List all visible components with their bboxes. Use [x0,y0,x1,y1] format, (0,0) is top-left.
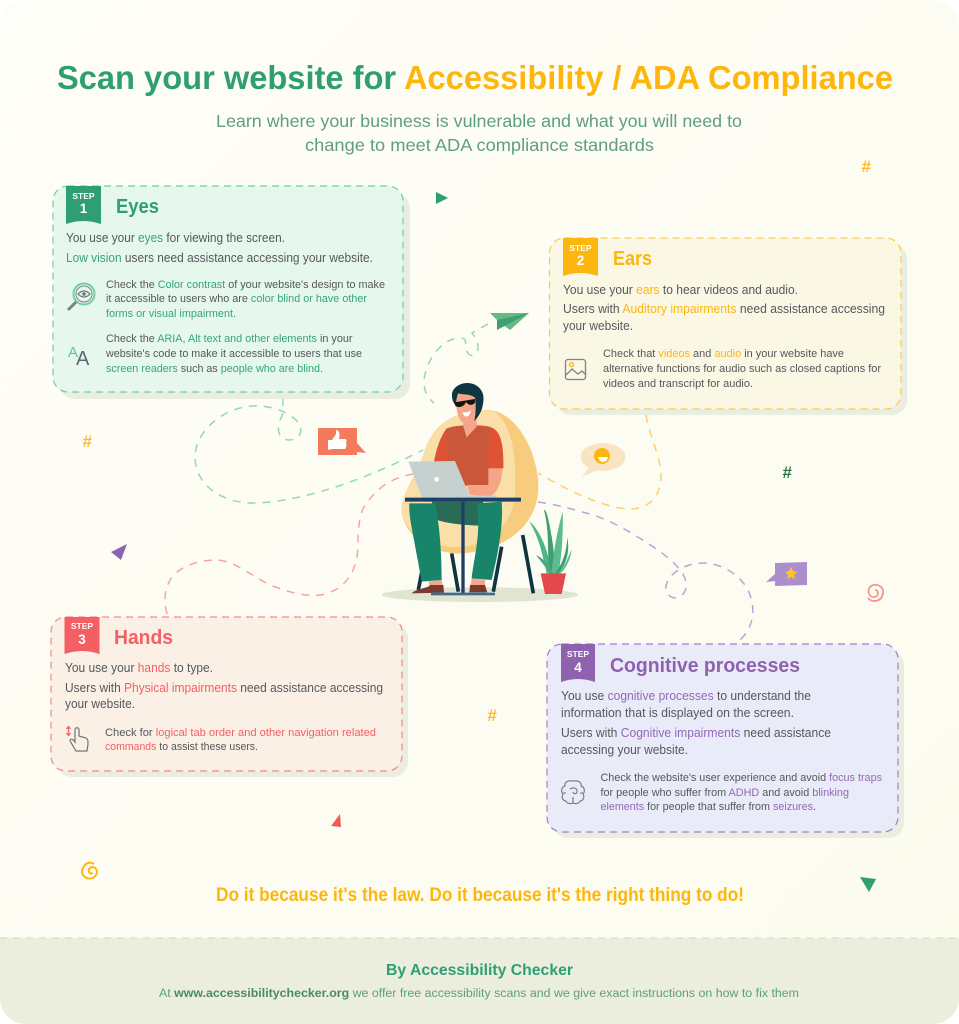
heading: cognitive processes: Cognitive processes [610,655,800,677]
heading: ears: Ears [613,248,652,270]
intro text: ears: your website. [563,319,633,333]
icon: magnifier with eye [68,284,94,310]
intro text: eyes [66,231,373,265]
heading: eyes: Eyes [116,196,159,218]
decorative hash: top right: # [861,157,871,176]
intro text: cognitive: accessing your website. [561,743,688,757]
step 1 ribbon: 1 [80,201,88,216]
step 4 ribbon: 4 [574,660,582,675]
dashed connector: green from eyes card to person [195,398,423,503]
footer heading: By Accessibility Checker [386,962,573,979]
step 3 ribbon [64,617,100,654]
subtitle [216,111,742,155]
panel: step 2 ears [550,238,907,415]
subtitle: change to meet ADA compliance standards [305,135,654,155]
intro text: hands: your website. [65,697,135,711]
text: color contrast check: it accessible to users who are color blind or have other [106,293,367,305]
icon: star speech bubble [766,562,807,586]
dashed connector: yellow from ears card to person [538,415,661,509]
intro text: ears: Users with Auditory impairments need assistance accessing [563,302,885,316]
dashed connector: purple from person to cognitive card [538,502,753,640]
icon: brain [562,781,584,804]
decorative hash: dark green: # [782,463,792,482]
step 3 ribbon: STEP [71,621,93,631]
text: focus traps check: elements for people that suffer from seizures. [600,801,816,813]
icon: pink spiral [868,585,883,601]
text: captions check: Check that videos and audio in your website have [603,348,844,360]
illustration: person on egg chair with laptop [382,383,578,602]
decorative triangle: purple [111,544,127,560]
intro text: hands [65,661,383,711]
decorative triangle: green bottom [860,877,876,892]
footer band [0,938,959,1024]
decorative hash: lower middle: # [487,706,497,725]
subtitle: Learn where your business is vulnerable and what you will need to [216,111,742,131]
text: focus traps check: Check the website's user experience and avoid focus traps [600,772,883,784]
text: captions check: videos and transcript for audio. [603,378,753,390]
panel: step 4 cognitive processes [547,644,904,838]
intro text: hands: Users with Physical impairments need assistance accessing [65,681,383,695]
icon: pointing hand with arrows [66,726,88,751]
intro text: eyes: Low vision users need assistance accessing your website. [66,251,373,265]
decorative triangle: red [331,814,341,827]
intro text: hands: You use your hands to type. [65,661,213,675]
text: captions check: alternative functions for audio such as closed captions for [603,363,881,375]
decorative triangle: green top [436,192,448,204]
title: Scan your website for Accessibility / ADA Compliance [57,59,893,96]
text: tab order check: Check for logical tab order and other navigation related [105,727,376,739]
dashed connector: red from hands card to person [165,474,413,614]
call to action: Do it because it's the law. Do it because it's the right thing to do! [216,885,744,906]
text: focus traps check: for people who suffer from ADHD and avoid blinking [600,787,849,799]
intro text: eyes: You use your eyes for viewing the screen. [66,231,285,245]
icon: smiley speech bubble [580,443,626,477]
text: color contrast check [106,279,385,320]
text: tab order check: commands to assist these users. [105,741,258,753]
intro text: cognitive [561,689,831,757]
step 2 ribbon [563,238,598,276]
intro text: cognitive: information that is displayed on the screen. [561,706,794,720]
panel: step 3 hands [51,617,408,777]
text: captions check [603,348,881,390]
icon: image placeholder [566,360,586,380]
intro text: cognitive: Users with Cognitive impairments need assistance [561,726,831,740]
text: aria alt text check: screen readers such as people who are blind. [106,363,323,375]
panel: step 1 eyes [53,186,410,399]
heading: hands: Hands [114,627,173,649]
text: aria alt text check: Check the ARIA, Alt text and other elements in your [106,333,353,345]
intro text: ears [563,283,885,333]
step 1 ribbon [66,186,101,224]
icon: yellow spiral [82,863,97,879]
icon: paper plane [490,313,529,330]
icon: text size AA [68,344,90,370]
icon: text size AA: A [76,348,90,370]
text: aria alt text check [105,333,362,375]
text: tab order check [105,727,376,753]
text: color contrast check: Check the Color contrast of your website's design to make [106,279,385,291]
intro text: cognitive: You use cognitive processes to understand the [561,689,811,703]
head [452,383,484,437]
text: focus traps check [600,772,883,813]
step 2 ribbon: 2 [577,253,584,268]
step 1 ribbon: STEP [72,191,95,201]
step 4 ribbon [561,644,595,682]
decorative hash: left: # [82,432,92,451]
text: aria alt text check: website's code to make it accessible to users that use [105,348,362,360]
footer text: At www.accessibilitychecker.org we offer free accessibility scans and we give exact instructions on how to fix them [159,988,799,1000]
icon: text size AA: A [68,344,78,361]
dashed connector: paper plane trail [424,324,488,403]
plant [529,510,572,594]
step 4 ribbon: STEP [567,649,589,659]
icon: thumbs up speech bubble [318,428,366,455]
intro text: ears: You use your ears to hear videos and audio. [563,283,798,297]
step 2 ribbon: STEP [569,243,592,253]
text: color contrast check: forms or visual impairment. [106,308,236,320]
step 3 ribbon: 3 [78,632,86,647]
